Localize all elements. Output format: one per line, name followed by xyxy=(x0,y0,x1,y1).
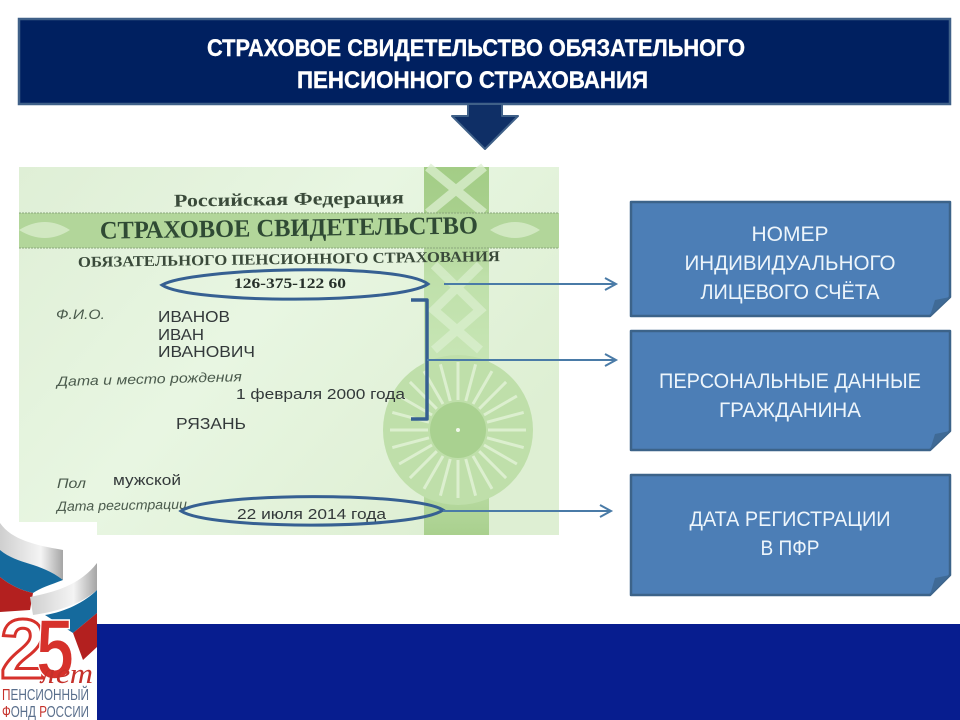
bracket: personal data xyxy=(411,300,427,419)
personal data labels and values: РЯЗАНЬ xyxy=(176,416,246,433)
number 25 xyxy=(0,602,74,696)
header banner xyxy=(19,19,950,104)
arrow: personal data xyxy=(427,354,616,366)
personal data labels and values: ИВАН xyxy=(158,327,204,344)
insurance certificate xyxy=(19,167,559,535)
personal data labels and values: ИВАНОВ xyxy=(158,309,230,326)
highlight ellipse: account number xyxy=(162,270,428,299)
box: registration date: ДАТА РЕГИСТРАЦИИ xyxy=(690,508,890,531)
personal data labels and values: Пол xyxy=(57,476,86,491)
arrow: registration date xyxy=(443,505,611,517)
certificate heading text: ОБЯЗАТЕЛЬНОГО ПЕНСИОННОГО СТРАХОВАНИЯ xyxy=(78,249,500,271)
box: registration date xyxy=(631,475,950,595)
word years: лет xyxy=(39,659,93,690)
personal data labels and values xyxy=(54,306,406,514)
arrow: account number xyxy=(444,278,616,290)
personal data labels and values: Дата регистрации xyxy=(55,497,188,514)
box: personal data xyxy=(631,331,950,450)
horizontal title band xyxy=(19,213,559,248)
personal data labels and values: Ф.И.О. xyxy=(56,306,105,322)
vertical security stripe xyxy=(424,167,489,535)
certificate heading text: СТРАХОВОЕ СВИДЕТЕЛЬСТВО xyxy=(100,212,478,245)
personal data labels and values: ИВАНОВИЧ xyxy=(158,344,255,361)
registration date: 22 июля 2014 года xyxy=(237,506,387,523)
fund name: ПЕНСИОННЫЙ xyxy=(2,685,89,704)
box: personal data: ПЕРСОНАЛЬНЫЕ ДАННЫЕ xyxy=(659,370,921,393)
flag ribbon xyxy=(0,523,97,660)
number 25: 5 xyxy=(36,602,74,696)
box: account number: НОМЕР xyxy=(752,223,828,246)
box: personal data: ГРАЖДАНИНА xyxy=(719,399,861,422)
certificate heading text: Российская Федерация xyxy=(174,187,404,211)
arrow: header down to certificate xyxy=(452,104,518,149)
fund name xyxy=(2,685,89,720)
personal data labels and values: 1 февраля 2000 года xyxy=(236,386,406,403)
personal data labels and values: мужской xyxy=(113,473,181,489)
personal data labels and values: Дата и место рождения xyxy=(54,369,242,389)
security rosette xyxy=(383,355,533,505)
box: account number: ИНДИВИДУАЛЬНОГО xyxy=(684,252,896,275)
header title xyxy=(207,35,745,94)
account number: 126-375-122 60 xyxy=(234,276,346,292)
certificate heading text xyxy=(78,187,500,271)
header title: СТРАХОВОЕ СВИДЕТЕЛЬСТВО ОБЯЗАТЕЛЬНОГО xyxy=(207,35,745,62)
logo: 25 years of Pension Fund xyxy=(0,522,97,720)
box: registration date: В ПФР xyxy=(760,537,820,560)
number 25: 2 xyxy=(0,602,46,696)
box: account number xyxy=(631,202,950,316)
footer band xyxy=(97,624,960,720)
box: account number: ЛИЦЕВОГО СЧЁТА xyxy=(700,281,880,304)
header title: ПЕНСИОННОГО СТРАХОВАНИЯ xyxy=(297,67,648,94)
highlight ellipse: registration date xyxy=(181,497,443,525)
